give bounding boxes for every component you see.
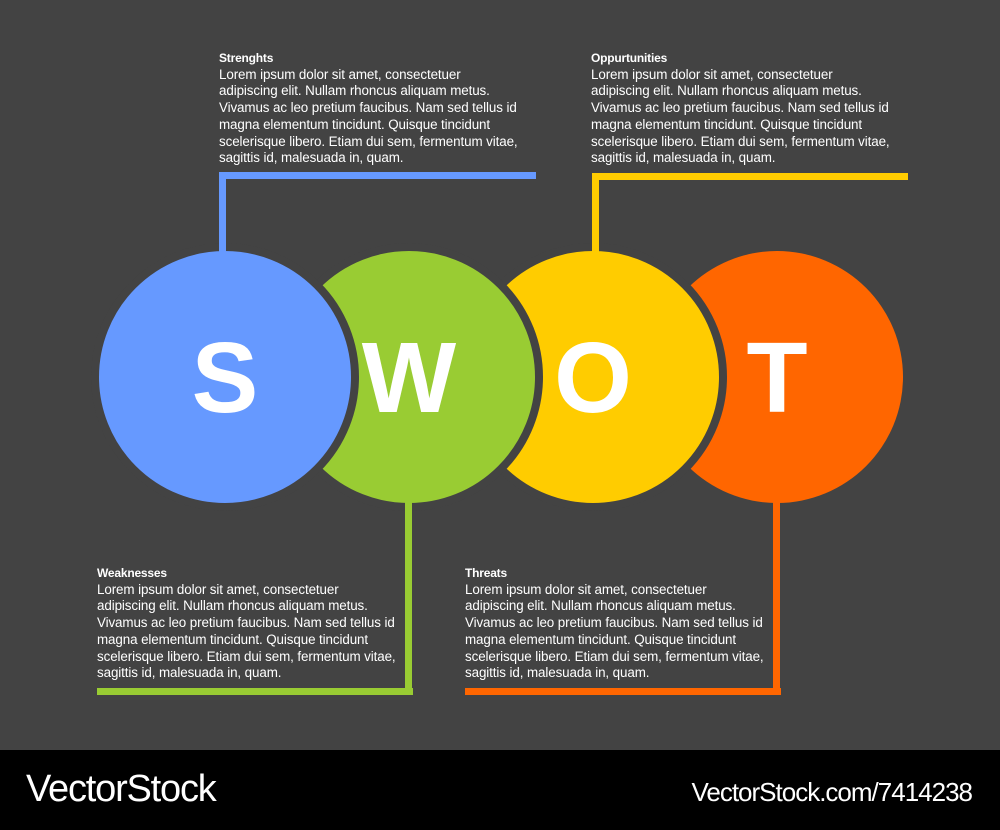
text: threats: adipiscing elit. Nullam rhoncus aliquam metus.: [465, 598, 736, 613]
text: opportunities: Lorem ipsum dolor sit amet, consectetuer: [591, 67, 833, 82]
text: weaknesses: scelerisque libero. Etiam dui sem, fermentum vitae,: [97, 649, 396, 664]
text: opportunities: adipiscing elit. Nullam rhoncus aliquam metus.: [591, 83, 862, 98]
text: threats: scelerisque libero. Etiam dui sem, fermentum vitae,: [465, 649, 764, 664]
text: strengths: adipiscing elit. Nullam rhoncus aliquam metus.: [219, 83, 490, 98]
text: opportunities: sagittis id, malesuada in, quam.: [591, 150, 775, 165]
footer logo: VectorStock: [26, 768, 216, 810]
circle T: [651, 251, 903, 503]
text: weaknesses: Vivamus ac leo pretium faucibus. Nam sed tellus id: [97, 615, 395, 630]
text: opportunities: Vivamus ac leo pretium faucibus. Nam sed tellus id: [591, 100, 889, 115]
text: opportunities: Oppurtunities: [591, 51, 667, 65]
text: weaknesses: [97, 566, 396, 680]
text: opportunities: scelerisque libero. Etiam dui sem, fermentum vitae,: [591, 134, 890, 149]
circle W: [279, 247, 539, 507]
text: threats: Vivamus ac leo pretium faucibus. Nam sed tellus id: [465, 615, 763, 630]
text: strengths: scelerisque libero. Etiam dui sem, fermentum vitae,: [219, 134, 518, 149]
text: weaknesses: magna elementum tincidunt. Quisque tincidunt: [97, 632, 368, 647]
circle S: [95, 247, 355, 507]
text: weaknesses: sagittis id, malesuada in, quam.: [97, 665, 281, 680]
text: weaknesses: adipiscing elit. Nullam rhoncus aliquam metus.: [97, 598, 368, 613]
connector: strengths: [219, 172, 536, 253]
text: strengths: Lorem ipsum dolor sit amet, consectetuer: [219, 67, 461, 82]
text: threats: sagittis id, malesuada in, quam.: [465, 665, 649, 680]
text: threats: Threats: [465, 566, 507, 580]
circle S: S: [192, 322, 258, 434]
connector: threats: [465, 501, 781, 695]
text: strengths: magna elementum tincidunt. Quisque tincidunt: [219, 117, 490, 132]
text: strengths: Strenghts: [219, 51, 273, 65]
circle O: O: [554, 322, 632, 434]
footer bar: [0, 750, 1000, 830]
text: weaknesses: Weaknesses: [97, 566, 167, 580]
text: strengths: [219, 51, 518, 165]
circle T: T: [746, 322, 808, 434]
text: threats: [465, 566, 764, 680]
text: opportunities: [591, 51, 890, 165]
text: threats: magna elementum tincidunt. Quisque tincidunt: [465, 632, 736, 647]
text: weaknesses: Lorem ipsum dolor sit amet, consectetuer: [97, 582, 339, 597]
text: opportunities: magna elementum tincidunt. Quisque tincidunt: [591, 117, 862, 132]
text: threats: Lorem ipsum dolor sit amet, consectetuer: [465, 582, 707, 597]
connector: weaknesses: [97, 501, 413, 695]
circle W: W: [362, 322, 457, 434]
text: strengths: sagittis id, malesuada in, quam.: [219, 150, 403, 165]
footer url: VectorStock.com/7414238: [691, 777, 972, 807]
text: strengths: Vivamus ac leo pretium faucibus. Nam sed tellus id: [219, 100, 517, 115]
circle O: [463, 247, 723, 507]
connector: opportunities: [592, 173, 908, 253]
